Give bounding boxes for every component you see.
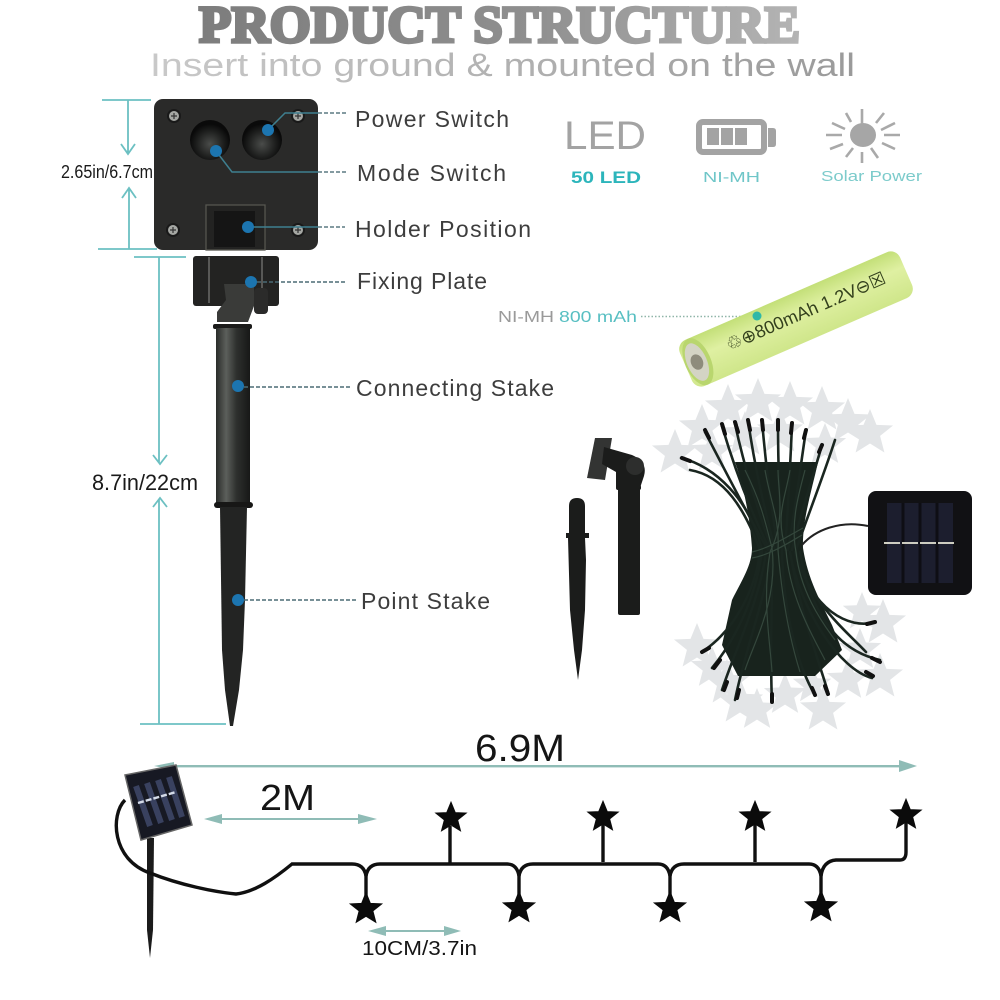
star string light bundle [652,378,972,729]
label: lead length: 2M [260,777,315,818]
string stars [351,800,921,922]
callout: mode switch [210,145,506,186]
callout: power switch: Power Switch [355,106,509,132]
icon: LED [564,114,646,187]
icon: sun [821,109,922,185]
wire highlights [745,470,835,672]
label: star spacing: 10CM/3.7in [362,938,477,960]
bundled wires [722,462,842,676]
label: total length: 6.9M [475,728,565,770]
callout: fixing plate: Fixing Plate [357,268,487,294]
arrow: total length [154,760,917,772]
clear stars [652,378,906,729]
callout: holder position: Holder Position [355,216,531,242]
callout: point stake [232,588,490,614]
dimension: box height [98,100,157,249]
callout: holder position [242,216,531,242]
label: battery capacity: NI-MH [498,309,554,326]
icon: sun: Solar Power [821,168,922,185]
callout: mode switch: Mode Switch [357,160,506,186]
callout: power switch [262,106,509,136]
callout: point stake: Point Stake [361,588,490,614]
point stake [566,498,589,680]
arrow: lead length [204,814,377,824]
small solar panel and stake [125,765,192,958]
connecting stake [587,438,645,615]
battery illustration [676,248,916,390]
dimension: stake height [134,257,226,724]
panel: solar box front view [154,99,318,250]
icon: LED: 50 LED [571,168,641,187]
battery label: ♲⊕800mAh 1.2V⊖☒ [723,268,889,355]
dimension label: box height: 2.65in/6.7cm [61,162,153,182]
label: battery capacity [498,309,757,326]
subtitle: Insert into ground & mounted on the wall [150,47,855,83]
light string schematic [116,800,906,900]
icon: LED: LED [564,114,646,158]
panel: fixing plate and stake [193,256,279,726]
callout: connecting stake [232,375,554,401]
icon: battery: NI-MH [703,169,760,186]
dimension label: stake height: 8.7in/22cm [92,470,198,495]
solar panel [802,491,972,595]
callout dot: battery [752,312,762,320]
callout: connecting stake: Connecting Stake [356,375,554,401]
label: battery capacity: 800 mAh [559,309,637,326]
icon: battery [699,122,776,186]
callout: fixing plate [245,268,487,294]
loose stakes [566,438,645,680]
light tips [682,420,880,702]
arrow: star spacing [368,926,461,936]
